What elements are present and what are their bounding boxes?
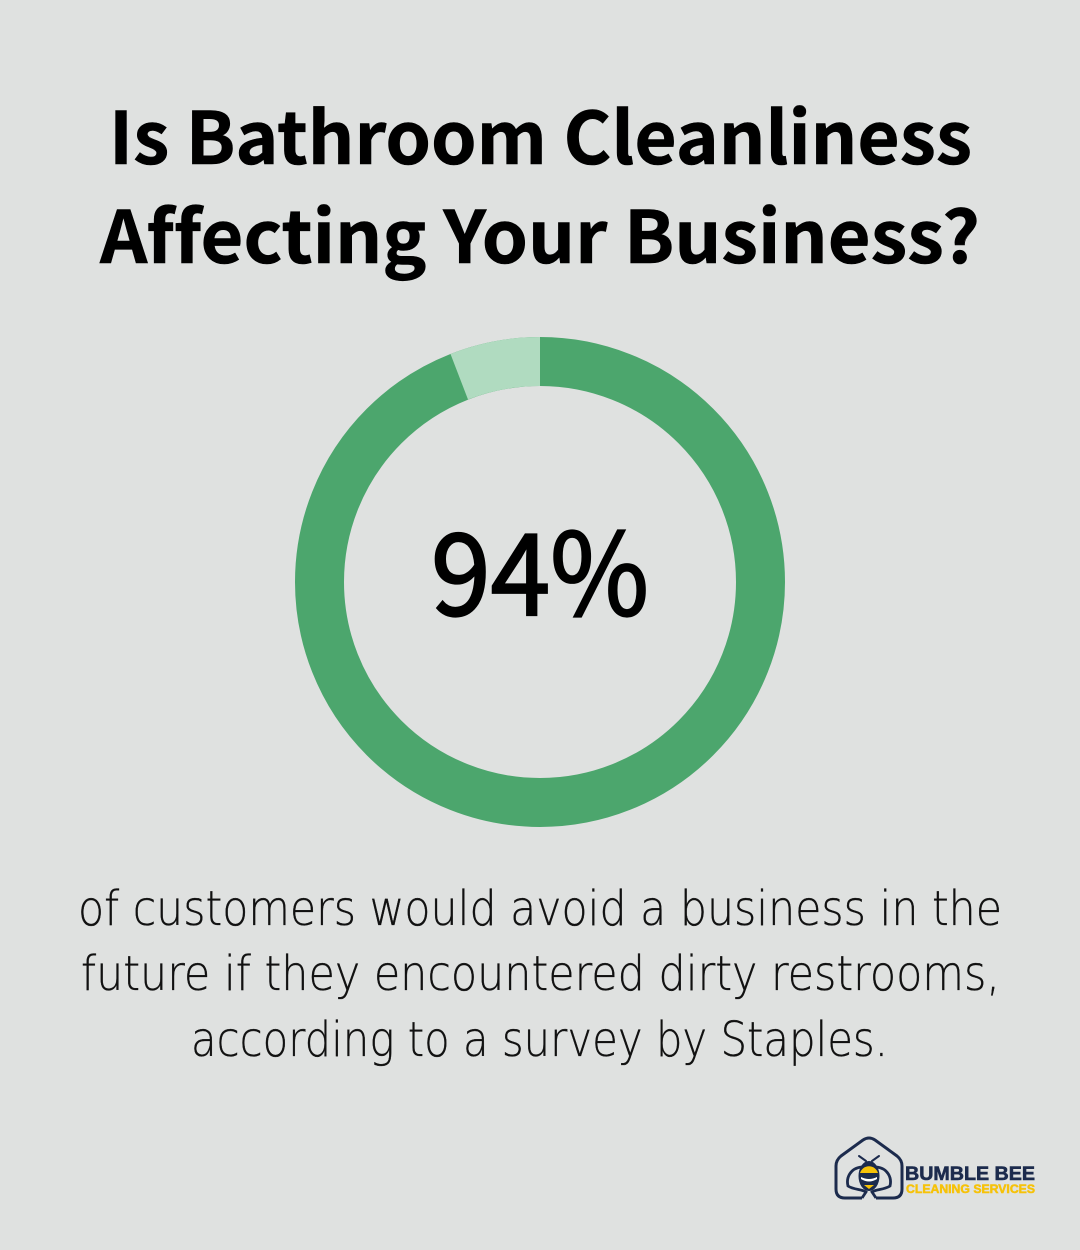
description text <box>78 881 1002 1068</box>
description text: according to a survey by Staples. <box>191 1012 888 1068</box>
donut chart: 94% <box>320 337 760 802</box>
logo wordmark: BUMBLE BEE <box>905 1164 1035 1185</box>
logo tagline: CLEANING SERVICES <box>906 1182 1035 1196</box>
title: Is Bathroom Cleanliness <box>109 80 972 185</box>
title <box>99 80 980 284</box>
title: Affecting Your Business? <box>99 179 980 284</box>
icon: house with bee <box>836 1138 902 1198</box>
statistic: 94%: 94% <box>431 484 649 648</box>
logo: Bumble Bee Cleaning Services <box>836 1138 1035 1198</box>
remaining 6% segment <box>450 337 540 400</box>
description text: future if they encountered dirty restrooms, <box>81 946 1000 1002</box>
